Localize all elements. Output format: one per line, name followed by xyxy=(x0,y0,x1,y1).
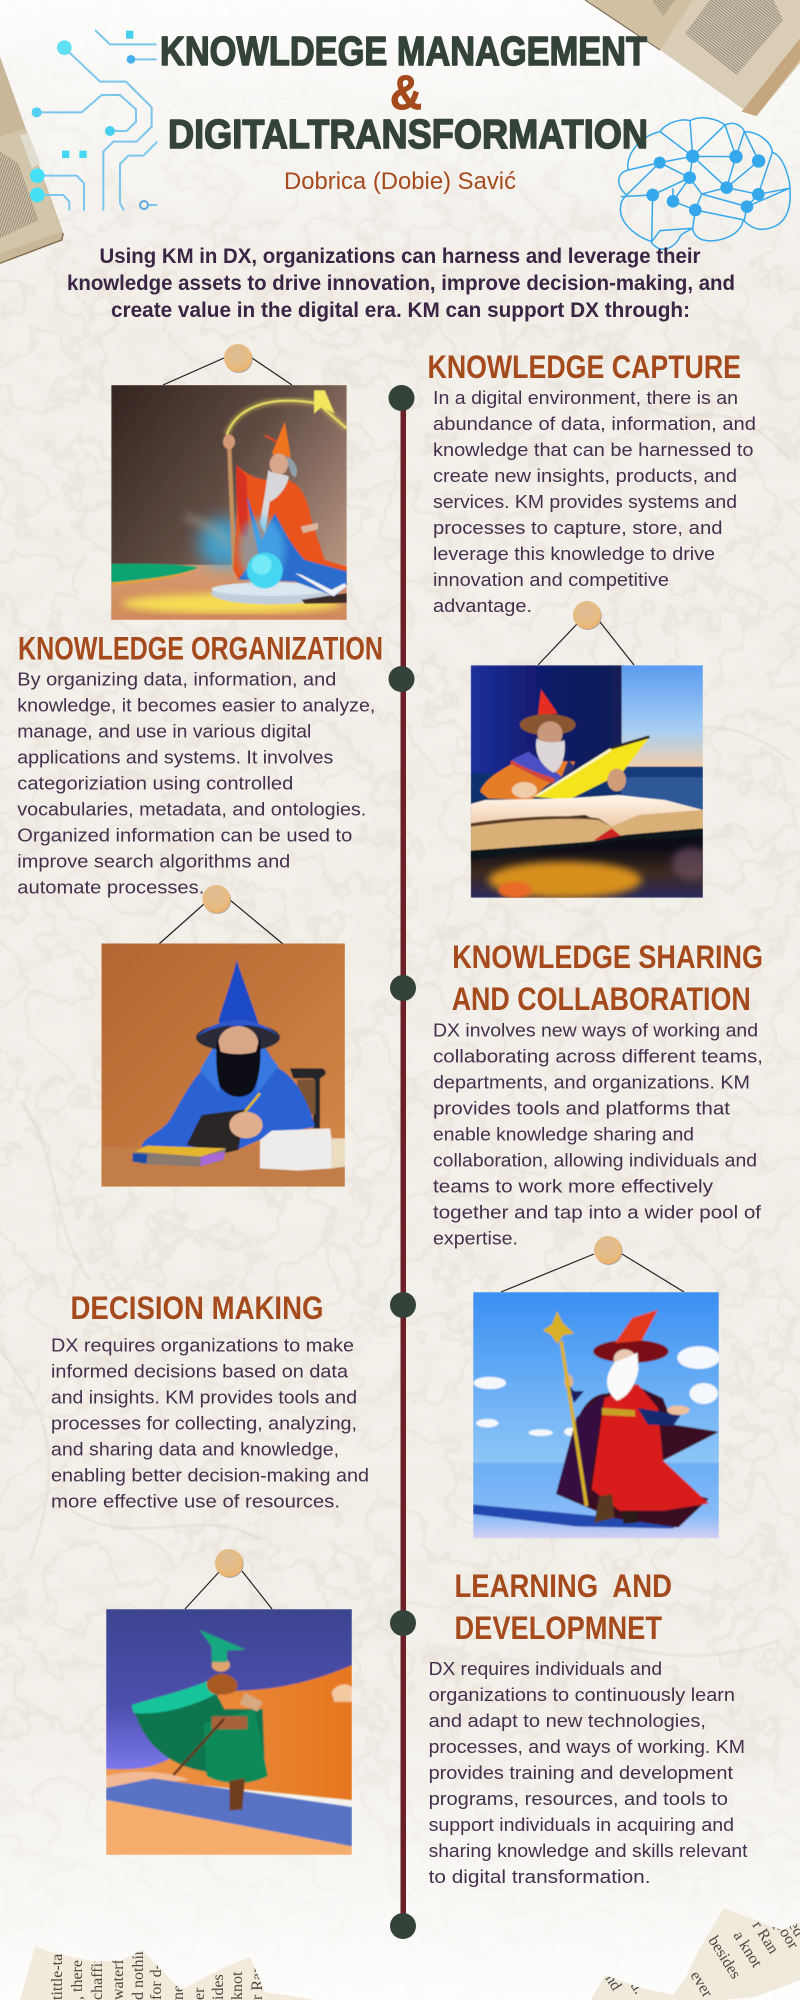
learning and development heading: DEVELOPMNET xyxy=(454,1610,662,1646)
knowledge organization text xyxy=(17,670,375,898)
knowledge capture text: innovation and competitive xyxy=(433,570,669,590)
author: Dobrica (Dobie) Savić xyxy=(284,168,516,195)
book corner: left xyxy=(0,57,63,263)
learning and development text: sharing knowledge and skills relevant xyxy=(429,1841,748,1861)
torn paper: bottom left: d nothin xyxy=(130,1947,147,2000)
title xyxy=(160,28,648,157)
decision making text xyxy=(51,1336,369,1512)
torn paper: bottom left: ne xyxy=(170,1985,187,2000)
knowledge sharing text: collaborating across different teams, xyxy=(433,1046,763,1066)
torn paper: bottom left: for d- xyxy=(148,1964,165,2000)
torn paper: bottom left: , there xyxy=(69,1960,86,2000)
knowledge organization text: knowledge, it becomes easier to analyze, xyxy=(17,696,375,716)
learning and development heading: LEARNING AND xyxy=(454,1568,672,1604)
knowledge sharing text: together and tap into a wider pool of xyxy=(433,1202,762,1222)
learning and development text: support individuals in acquiring and xyxy=(429,1815,734,1835)
wizard image 3 xyxy=(101,943,345,1187)
knowledge capture text: In a digital environment, there is an xyxy=(433,388,738,408)
knowledge organization text: manage, and use in various digital xyxy=(17,722,311,742)
wizard image 5 xyxy=(106,1609,352,1855)
torn paper: bottom left: waterf xyxy=(110,1958,127,2000)
knowledge sharing text: DX involves new ways of working and xyxy=(433,1020,758,1040)
knowledge organization text: automate processes. xyxy=(17,878,204,898)
knowledge sharing text: provides tools and platforms that xyxy=(433,1098,730,1118)
title: DIGITALTRANSFORMATION xyxy=(168,111,648,157)
torn paper: bottom right: a knot xyxy=(730,1928,765,1971)
wizard image 2 xyxy=(470,665,703,898)
knowledge sharing heading xyxy=(452,939,763,1017)
timeline xyxy=(388,385,416,1939)
circuit decoration xyxy=(30,30,157,211)
brain network icon xyxy=(619,118,790,249)
knowledge sharing text: collaboration, allowing individuals and xyxy=(433,1150,757,1170)
hanger pin 2 xyxy=(538,601,634,665)
knowledge capture heading: KNOWLEDGE CAPTURE xyxy=(428,349,741,385)
introduction text xyxy=(67,245,735,322)
decision making text: and insights. KM provides tools and xyxy=(51,1388,357,1408)
introduction text: knowledge assets to drive innovation, improve decision-making, and xyxy=(67,272,735,295)
torn paper: bottom left xyxy=(20,1946,315,2000)
torn paper: bottom right xyxy=(591,1908,800,2000)
learning and development heading xyxy=(454,1568,672,1646)
knowledge sharing text: enable knowledge sharing and xyxy=(433,1124,694,1144)
title: & xyxy=(390,67,422,120)
hanger pin 3 xyxy=(159,885,283,944)
learning and development text: programs, resources, and tools to xyxy=(429,1789,728,1809)
decision making text: informed decisions based on data xyxy=(51,1362,349,1382)
knowledge organization text: Organized information can be used to xyxy=(17,826,352,846)
book corner: top right xyxy=(585,0,800,116)
torn paper: bottom left: tittle-ta xyxy=(49,1954,66,2000)
hanger pin 1 xyxy=(163,344,292,385)
knowledge organization text: applications and systems. It involves xyxy=(17,748,333,768)
introduction text: Using KM in DX, organizations can harness and leverage their xyxy=(100,245,700,268)
learning and development text: to digital transformation. xyxy=(429,1867,650,1887)
decision making text: and sharing data and knowledge, xyxy=(51,1440,339,1460)
knowledge sharing text xyxy=(433,1020,763,1248)
decision making heading: DECISION MAKING xyxy=(70,1290,324,1326)
wizard image 4 xyxy=(473,1292,719,1538)
knowledge organization heading: KNOWLEDGE ORGANIZATION xyxy=(18,630,383,666)
knowledge capture text: create new insights, products, and xyxy=(433,466,737,486)
introduction text: create value in the digital era. KM can support DX through: xyxy=(111,299,690,322)
hanger pin 4 xyxy=(501,1236,684,1292)
knowledge capture text: services. KM provides systems and xyxy=(433,492,737,512)
torn paper: bottom left: ides xyxy=(210,1974,227,2000)
decision making text: processes for collecting, analyzing, xyxy=(51,1414,357,1434)
knowledge organization text: By organizing data, information, and xyxy=(17,670,336,690)
knowledge sharing text: departments, and organizations. KM xyxy=(433,1072,750,1092)
learning and development text xyxy=(429,1659,748,1887)
decision making text: DX requires organizations to make xyxy=(51,1336,354,1356)
torn paper: bottom left: knot xyxy=(229,1971,246,2000)
torn paper: bottom right: r Ran xyxy=(749,1918,782,1957)
wizard image 1 xyxy=(111,385,347,620)
learning and development text: provides training and development xyxy=(429,1763,733,1783)
knowledge capture text: processes to capture, store, and xyxy=(433,518,722,538)
knowledge organization text: categoriziation using controlled xyxy=(17,774,293,794)
learning and development text: processes, and ways of working. KM xyxy=(429,1737,745,1757)
knowledge organization text: improve search algorithms and xyxy=(17,852,290,872)
torn paper: bottom right: d. xyxy=(627,1978,647,1997)
learning and development text: and adapt to new technologies, xyxy=(429,1711,706,1731)
knowledge sharing heading: AND COLLABORATION xyxy=(452,981,751,1017)
learning and development text: organizations to continuously learn xyxy=(429,1685,735,1705)
knowledge sharing text: expertise. xyxy=(433,1228,518,1248)
torn paper: bottom left: chaffir xyxy=(89,1957,106,2000)
decision making text: enabling better decision-making and xyxy=(51,1466,369,1486)
knowledge capture text: leverage this knowledge to drive xyxy=(433,544,715,564)
knowledge capture text xyxy=(433,388,756,616)
torn paper: bottom right: nd xyxy=(602,1971,625,1994)
hanger pin 5 xyxy=(185,1549,272,1609)
knowledge capture text: abundance of data, information, and xyxy=(433,414,756,434)
knowledge capture text: advantage. xyxy=(433,596,532,616)
knowledge sharing text: teams to work more effectively xyxy=(433,1176,713,1196)
learning and development text: DX requires individuals and xyxy=(429,1659,662,1679)
torn paper: bottom left: er xyxy=(191,1987,208,2000)
torn paper: bottom right: besides xyxy=(705,1933,744,1982)
title: KNOWLDEGE MANAGEMENT xyxy=(160,28,647,74)
decision making text: more effective use of resources. xyxy=(51,1492,340,1512)
torn paper: bottom left: r Ran xyxy=(249,1965,266,2000)
torn paper: bottom right: ever xyxy=(687,1968,716,2000)
knowledge organization text: vocabularies, metadata, and ontologies. xyxy=(17,800,366,820)
knowledge capture text: knowledge that can be harnessed to xyxy=(433,440,754,460)
